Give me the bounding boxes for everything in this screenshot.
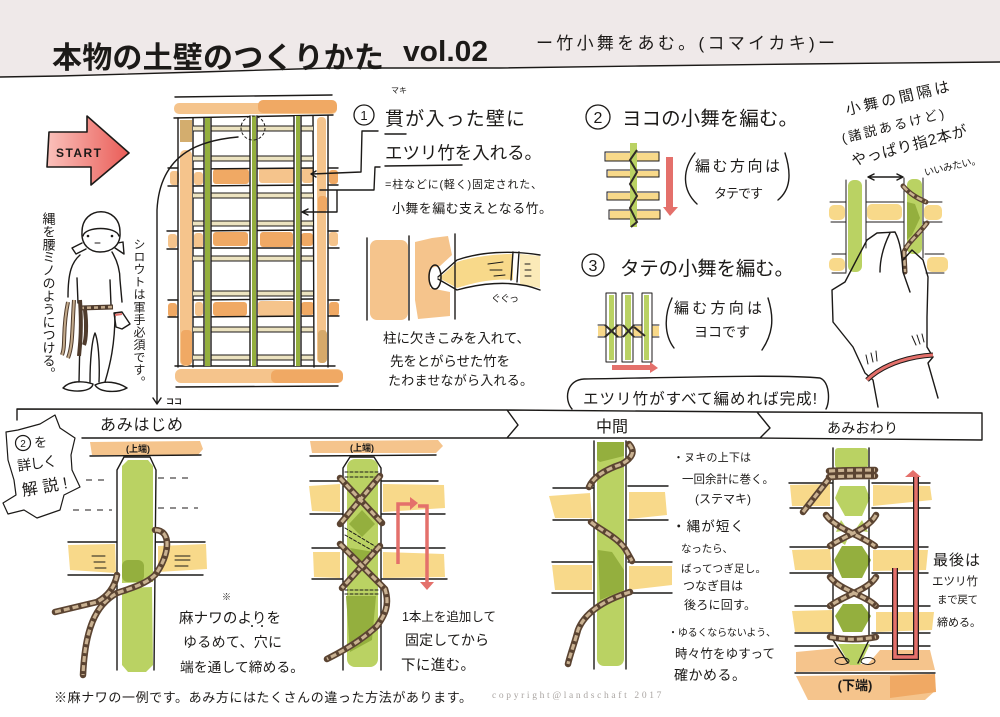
vertical bamboo xyxy=(204,116,301,366)
step 1 caption: たわませながら入れる。 xyxy=(388,373,533,388)
step 1 heading: マキ xyxy=(391,86,407,95)
callout leaders xyxy=(302,131,380,215)
diagram C notes: 時々竹をゆすって xyxy=(675,647,775,661)
step 2 diagram xyxy=(605,143,660,227)
diagram A xyxy=(55,441,207,675)
note: finger spacing: 小舞の間隔は xyxy=(844,78,951,119)
diagram B caption: 1本上を追加して xyxy=(402,609,496,624)
detail: notched post with bamboo xyxy=(367,234,540,320)
diagram D caption: まで戻て xyxy=(937,594,978,606)
diagram D caption: 締める。 xyxy=(937,615,981,629)
banner label: middle: 中間 xyxy=(596,418,628,436)
diagram A caption xyxy=(179,592,304,675)
wall diagram xyxy=(167,95,343,387)
step 1 heading xyxy=(354,86,542,166)
diagram B caption xyxy=(401,609,496,674)
step 3 heading xyxy=(582,254,794,280)
diagram D caption xyxy=(932,552,981,629)
step 3 direction note: ヨコです xyxy=(694,324,750,340)
diagram C notes: ・ゆるくならないよう、 xyxy=(668,627,776,639)
step 1 caption: 柱に欠きこみを入れて、 xyxy=(383,331,530,346)
diagram: glove measuring gap xyxy=(829,174,948,407)
step 1 note xyxy=(385,177,552,216)
note: finger spacing: (諸説あるけど) xyxy=(840,106,946,146)
step 1 caption: 先をとがらせた竹を xyxy=(390,354,510,369)
title xyxy=(52,36,488,75)
vertical text: gloves note: シロウトは軍手必須です。 xyxy=(132,238,146,388)
diagram A caption: ゆるめて、穴に xyxy=(183,634,282,650)
step 3 direction note: 編む方向は xyxy=(674,300,762,317)
diagram C xyxy=(549,441,672,669)
thin horizontal bamboo xyxy=(193,126,313,360)
arrow: up and down path xyxy=(398,497,434,590)
process banner xyxy=(17,409,982,440)
arrow: back up to eturi bamboo xyxy=(895,470,921,657)
diagram B caption: 固定してから xyxy=(405,632,489,648)
diagram B caption: 下に進む。 xyxy=(401,657,475,674)
diagram A caption: 端を通して締める。 xyxy=(180,660,304,675)
burst callout: 詳しく xyxy=(16,453,58,474)
detail: notched post with bamboo: ぐぐっ xyxy=(491,294,519,305)
copyright: copyright@landschaft 2017 xyxy=(492,690,663,701)
horizontal nuki xyxy=(167,168,339,317)
diagram C notes: ・縄が短く xyxy=(672,519,744,534)
diagram C notes xyxy=(668,451,776,683)
note: finger spacing xyxy=(840,78,982,179)
step 2 direction note xyxy=(685,153,789,204)
callout: completion xyxy=(568,376,828,409)
title: vol.02 xyxy=(403,36,488,68)
note: finger spacing: やっぱり指2本が xyxy=(850,123,969,170)
footnote: ※麻ナワの一例です。あみ方にはたくさんの違った方法があります。 xyxy=(54,690,472,705)
subtitle: ー竹小舞をあむ。(コマイカキ)ー xyxy=(536,34,835,53)
step 1 heading: エツリ竹を入れる。 xyxy=(385,143,542,163)
burst callout: 2 xyxy=(20,439,26,450)
diagram D xyxy=(789,448,936,700)
step 2 direction note: 編む方向は xyxy=(695,158,780,175)
diagram C notes: 確かめる。 xyxy=(674,667,746,683)
step 3 heading: 3 xyxy=(589,258,598,275)
diagram D caption: エツリ竹 xyxy=(932,574,978,588)
step 2 heading: ヨコの小舞を編む。 xyxy=(622,108,798,130)
banner label: start: あみはじめ xyxy=(100,416,183,434)
diagram C notes: (ステマキ) xyxy=(695,492,751,506)
arrow: start xyxy=(47,116,129,185)
arrow: start: START xyxy=(56,146,102,160)
step 3 heading: タテの小舞を編む。 xyxy=(620,258,794,280)
diagram A: (上端) xyxy=(126,443,150,454)
step 1 note: 小舞を編む支えとなる竹。 xyxy=(392,201,552,216)
step 1 note: =柱などに(軽く)固定された、 xyxy=(385,177,542,191)
diagram A caption: ※ xyxy=(222,592,231,602)
top beam xyxy=(174,95,337,118)
diagram C notes: 後ろに回す。 xyxy=(684,598,756,612)
diagram A caption: 麻ナワのよりを xyxy=(179,610,281,627)
burst callout: を xyxy=(34,435,47,450)
header band xyxy=(0,0,1000,77)
diagram C notes: なったら、 xyxy=(681,543,733,555)
vertical text: rope note: 縄を腰ミノのようにつける。 xyxy=(40,212,56,380)
step 1 caption xyxy=(383,331,533,388)
step 3 direction note xyxy=(666,298,772,350)
arrow: knit sideways xyxy=(612,362,658,373)
step 2 direction note: タテです xyxy=(714,186,763,201)
step 3 diagram xyxy=(598,293,659,362)
diagram B: (上端) xyxy=(350,442,374,453)
diagram D: (下端) xyxy=(838,678,872,693)
arrow: knit downward xyxy=(663,157,678,216)
banner label: end: あみおわり xyxy=(827,420,898,436)
diagram C notes: つなぎ目は xyxy=(683,579,743,593)
diagram B xyxy=(309,440,447,670)
detail circle and leader to ココ xyxy=(153,116,265,406)
title: 本物の土壁のつくりかた xyxy=(52,42,384,75)
diagram D caption: 最後は xyxy=(933,552,980,569)
detail circle and leader to ココ: ココ xyxy=(166,397,182,406)
bottom beam xyxy=(175,366,343,387)
note: finger spacing: いいみたい。 xyxy=(923,154,982,179)
figure: worker with rope xyxy=(62,212,130,391)
diagram C notes: ばってつぎ足し。 xyxy=(681,562,766,575)
burst callout xyxy=(3,415,80,518)
posts xyxy=(178,116,328,367)
diagram C notes: ・ヌキの上下は xyxy=(673,451,751,464)
diagram C notes: 一回余計に巻く。 xyxy=(682,472,774,486)
step 2 heading: 2 xyxy=(594,110,603,127)
burst callout: 解説! xyxy=(21,474,69,500)
step 1 heading: 貫が入った壁に xyxy=(385,108,525,130)
callout: completion: エツリ竹がすべて編めれば完成! xyxy=(583,390,817,408)
step 1 heading: 1 xyxy=(360,108,368,123)
